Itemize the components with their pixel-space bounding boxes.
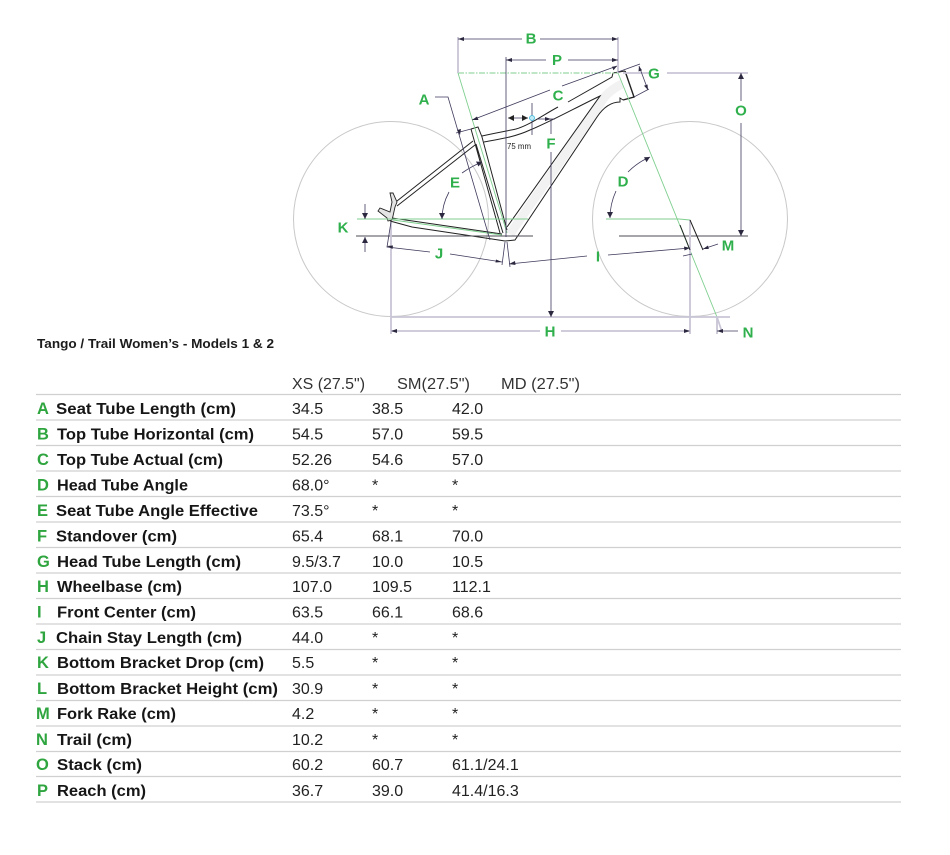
dimension M: M — [722, 238, 734, 254]
row H: 109.5 — [372, 579, 412, 596]
dimension F — [544, 117, 558, 317]
row G: 10.5 — [452, 554, 483, 571]
dimension O: O — [735, 102, 747, 120]
row H: 112.1 — [452, 579, 491, 596]
row K: K — [37, 654, 49, 672]
centre and reference lines — [356, 73, 748, 317]
row P — [37, 782, 519, 800]
row O: O — [36, 756, 49, 774]
row B: 54.5 — [292, 426, 323, 444]
dimension M — [703, 238, 734, 254]
row F — [37, 528, 483, 546]
dimension H: H — [545, 324, 555, 340]
front wheel — [592, 122, 788, 316]
row F: 70.0 — [452, 528, 483, 546]
geometry table — [36, 376, 901, 802]
dimension B — [458, 30, 618, 48]
row N: N — [36, 731, 48, 749]
dimension P: P — [552, 52, 562, 69]
dimension P — [506, 52, 618, 69]
row P: 36.7 — [292, 783, 323, 800]
row L: * — [452, 681, 458, 698]
row L — [37, 680, 458, 698]
row C — [37, 451, 483, 469]
row F: Standover (cm) — [56, 528, 177, 546]
row D: 68.0° — [292, 478, 330, 494]
row J: * — [452, 630, 458, 647]
dimension K — [338, 204, 368, 252]
row I: Front Center (cm) — [57, 604, 196, 622]
row I: I — [37, 604, 42, 622]
row O: Stack (cm) — [57, 757, 142, 774]
column headers: SM(27.5") — [397, 376, 470, 393]
row E: E — [37, 502, 48, 520]
row E: * — [452, 503, 458, 520]
row L: Bottom Bracket Height (cm) — [57, 681, 278, 698]
row I: 68.6 — [452, 604, 483, 622]
row N: * — [452, 732, 458, 749]
row D: Head Tube Angle — [57, 478, 188, 494]
row J: J — [37, 629, 46, 647]
row P: 39.0 — [372, 783, 403, 800]
row M: M — [36, 705, 50, 723]
dimension H — [391, 324, 690, 340]
dimension A: A — [419, 92, 430, 108]
dimension K: K — [338, 220, 349, 236]
row M — [36, 705, 458, 723]
column headers — [292, 376, 580, 393]
row C: 57.0 — [452, 452, 483, 469]
row G — [37, 553, 483, 571]
75 mm marker — [507, 103, 534, 151]
column headers: XS (27.5") — [292, 376, 365, 393]
dimension I: I — [596, 248, 600, 266]
dimension N — [717, 324, 753, 342]
row F: F — [37, 528, 47, 546]
row H: 107.0 — [292, 579, 332, 596]
row G: 10.0 — [372, 554, 403, 571]
row I — [37, 604, 483, 622]
dimension B: B — [526, 30, 537, 48]
row K: 5.5 — [292, 655, 314, 672]
dimension O — [733, 73, 749, 236]
row L: * — [372, 681, 378, 698]
row K — [37, 654, 458, 672]
row P: 41.4/16.3 — [452, 783, 519, 800]
row M: Fork Rake (cm) — [57, 706, 176, 723]
dimension N: N — [743, 324, 753, 342]
table row rules — [36, 394, 901, 802]
row G: G — [37, 553, 50, 571]
row A: 42.0 — [452, 401, 483, 418]
row H: Wheelbase (cm) — [57, 579, 182, 596]
column headers: MD (27.5") — [501, 376, 580, 393]
rear wheel — [294, 122, 488, 316]
dimension G: G — [648, 66, 660, 82]
row B — [37, 426, 483, 444]
row B: Top Tube Horizontal (cm) — [57, 426, 254, 444]
row L: 30.9 — [292, 681, 323, 698]
dimension extension lines — [391, 37, 748, 334]
row C: 54.6 — [372, 452, 403, 469]
row P: Reach (cm) — [57, 783, 146, 800]
row N: * — [372, 732, 378, 749]
row P: P — [37, 782, 48, 800]
dimension J — [387, 222, 505, 265]
row O: 60.2 — [292, 757, 323, 774]
row N — [36, 731, 458, 749]
row K: * — [372, 655, 378, 672]
dimension I — [507, 242, 692, 267]
dimension A — [419, 92, 490, 240]
bike geometry diagram — [294, 30, 788, 342]
row J: * — [372, 630, 378, 647]
row B: 59.5 — [452, 426, 483, 444]
row A: A — [37, 400, 49, 418]
dimension D — [607, 157, 650, 218]
row C: C — [37, 451, 49, 469]
row G: Head Tube Length (cm) — [57, 554, 241, 571]
row I: 66.1 — [372, 604, 403, 622]
row M: * — [452, 706, 458, 723]
dimension E: E — [450, 174, 460, 192]
row A: 38.5 — [372, 401, 403, 418]
row N: Trail (cm) — [57, 732, 132, 749]
row A — [37, 400, 483, 418]
bike frame — [378, 71, 634, 241]
row J: Chain Stay Length (cm) — [56, 630, 242, 647]
row D: * — [452, 478, 458, 494]
row J: 44.0 — [292, 630, 323, 647]
row K: Bottom Bracket Drop (cm) — [57, 655, 264, 672]
row F: 65.4 — [292, 528, 323, 546]
row E — [37, 502, 458, 520]
row E: 73.5° — [292, 503, 330, 520]
row O: 60.7 — [372, 757, 403, 774]
dimension F: F — [546, 136, 556, 152]
dimension E — [439, 162, 482, 219]
chart title: Tango / Trail Women’s - Models 1 & 2 — [37, 336, 274, 351]
row K: * — [452, 655, 458, 672]
row D: D — [37, 476, 49, 494]
row F: 68.1 — [372, 528, 403, 546]
row H — [37, 578, 491, 596]
75 mm marker: 75 mm — [507, 142, 531, 151]
row E: * — [372, 503, 378, 520]
dimension C — [472, 66, 617, 120]
row M: 4.2 — [292, 706, 314, 723]
row B: B — [37, 426, 49, 444]
dimension C: C — [553, 88, 564, 104]
dimension D: D — [618, 174, 629, 190]
dimension J: J — [435, 246, 443, 262]
row A: 34.5 — [292, 401, 323, 418]
row B: 57.0 — [372, 426, 403, 444]
row O: 61.1/24.1 — [452, 757, 519, 774]
dimension G — [618, 64, 660, 97]
row C: Top Tube Actual (cm) — [57, 452, 223, 469]
row H: H — [37, 578, 49, 596]
row E: Seat Tube Angle Effective — [56, 503, 258, 520]
row G: 9.5/3.7 — [292, 554, 341, 571]
row D: * — [372, 478, 378, 494]
row J — [37, 629, 458, 647]
row M: * — [372, 706, 378, 723]
row A: Seat Tube Length (cm) — [56, 401, 236, 418]
row C: 52.26 — [292, 452, 332, 469]
row L: L — [37, 680, 47, 698]
row O — [36, 756, 519, 774]
row D — [37, 476, 458, 494]
row N: 10.2 — [292, 732, 323, 749]
row I: 63.5 — [292, 604, 323, 622]
